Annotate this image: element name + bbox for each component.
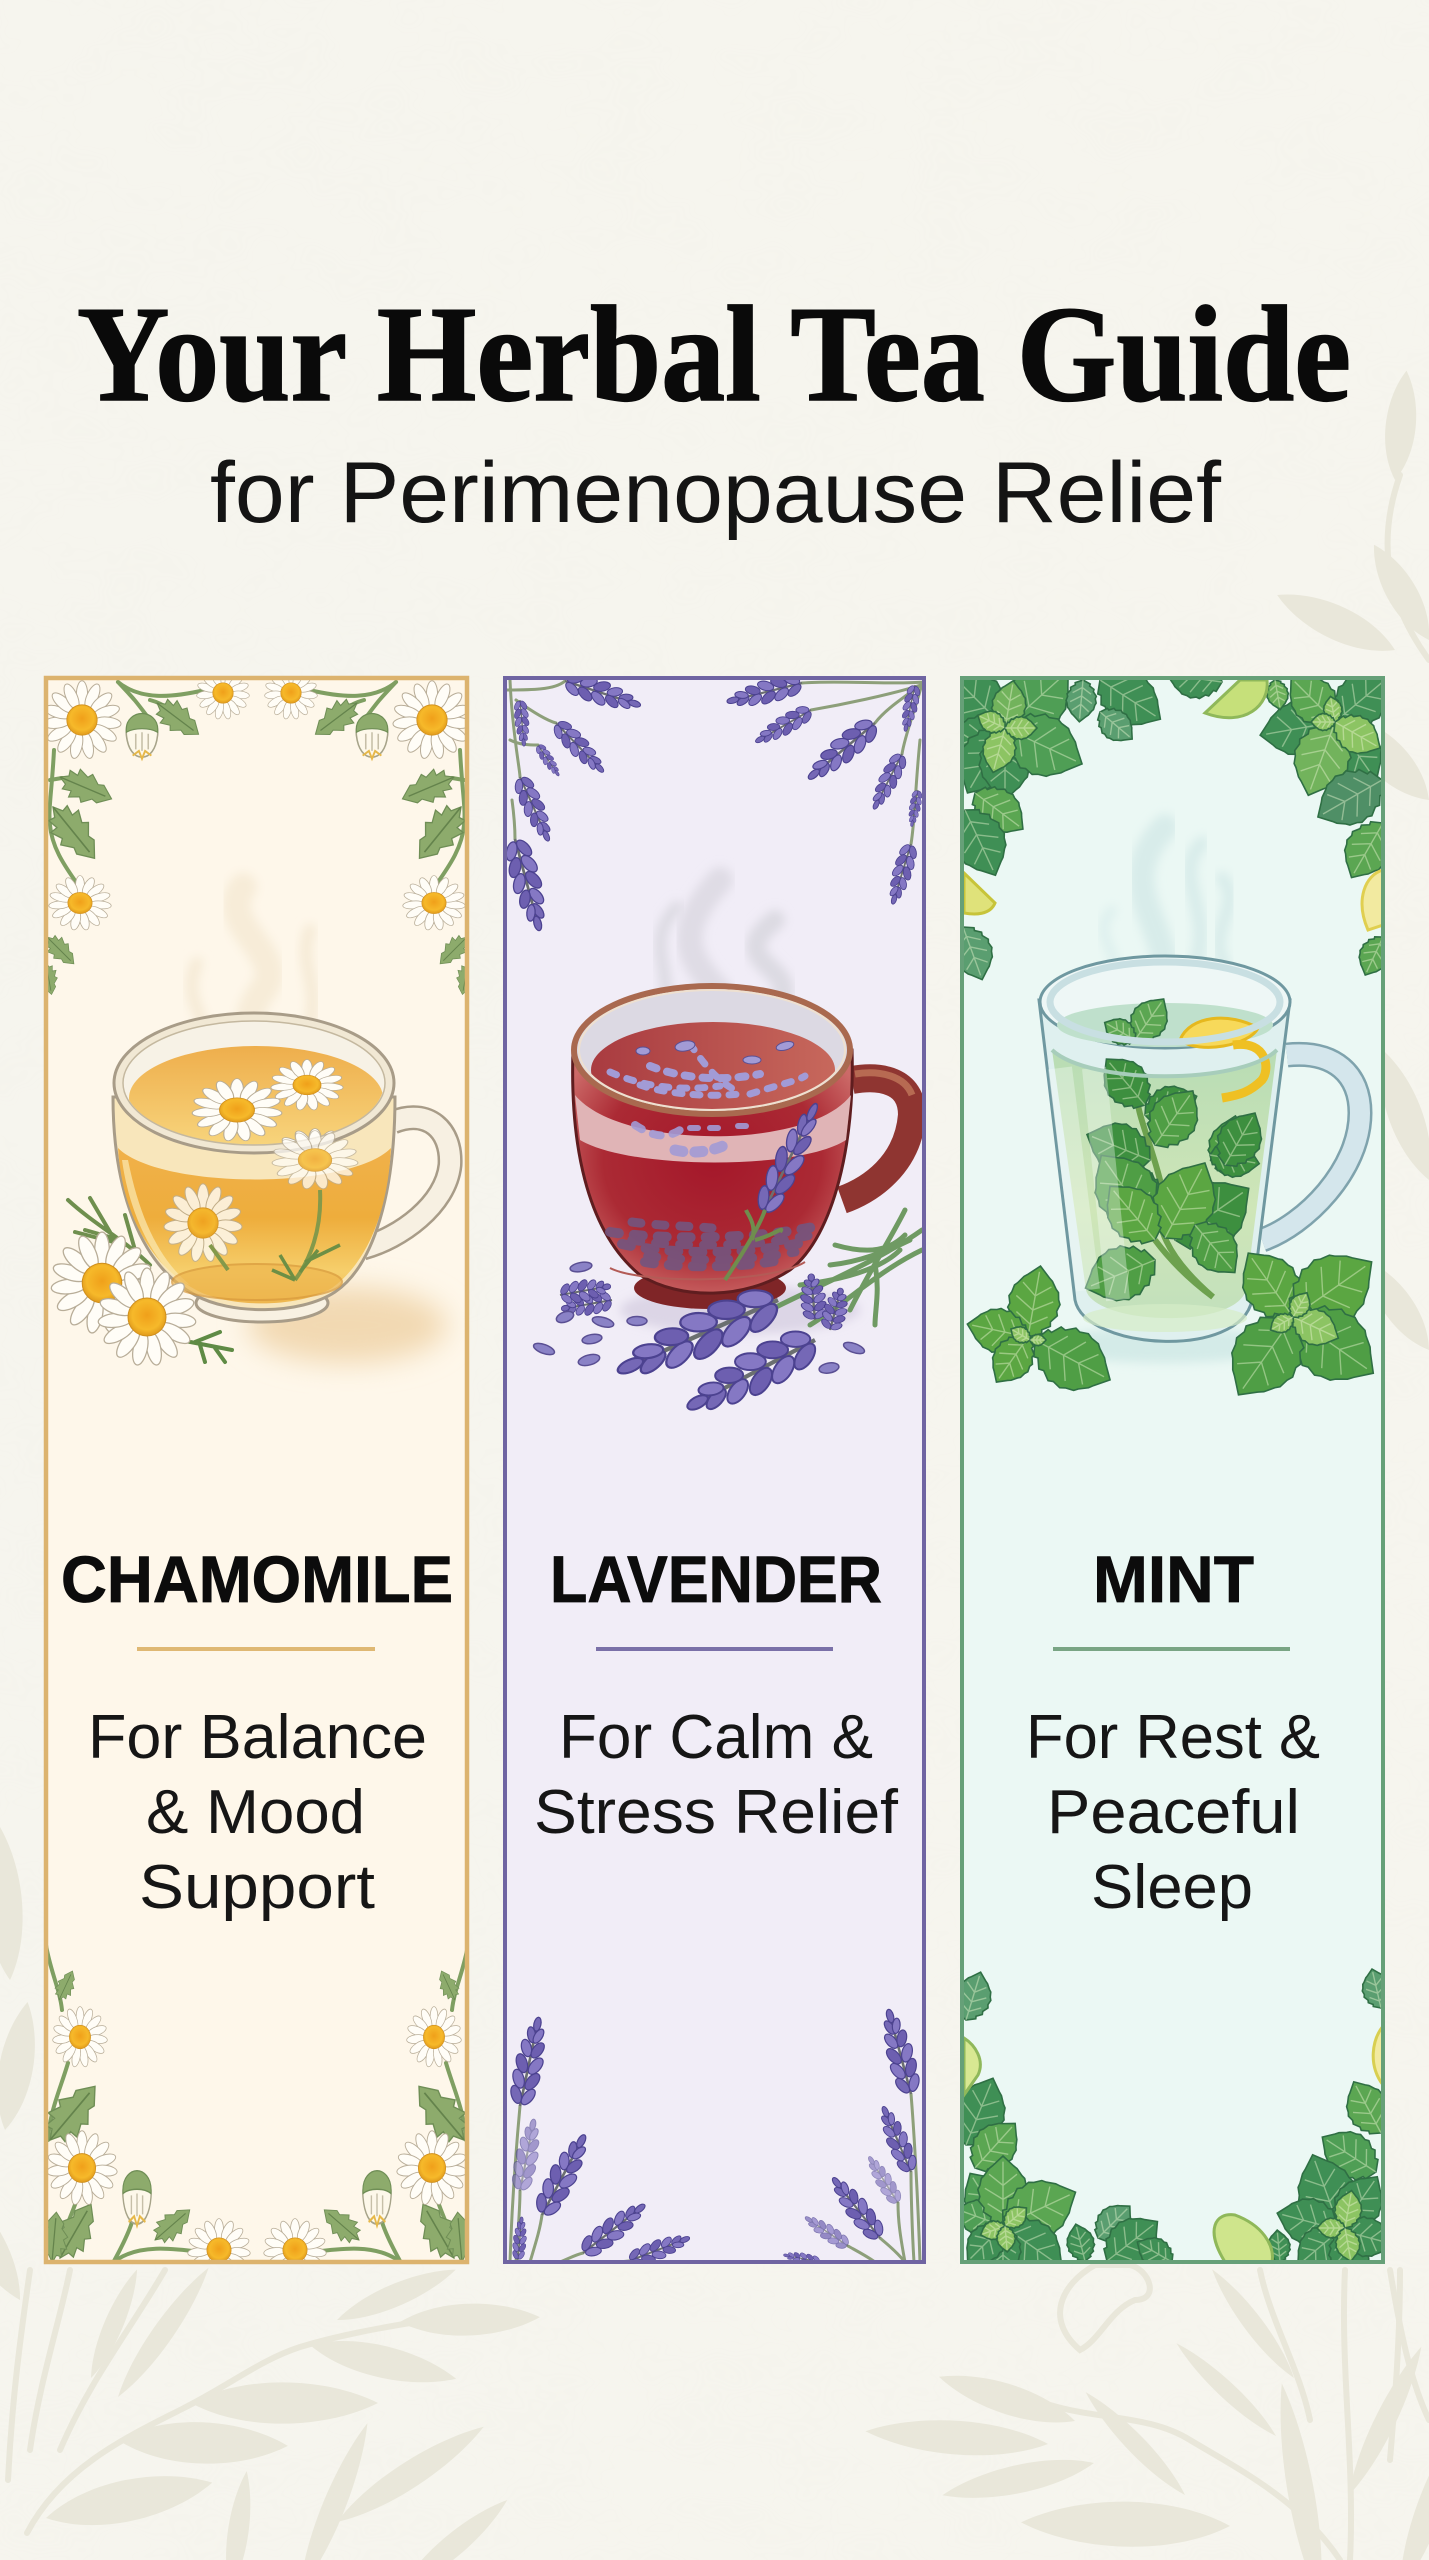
lavender border frame <box>505 678 924 2262</box>
subtitle: for Perimenopause Relief <box>210 445 1222 541</box>
chamomile benefit text: Support <box>139 1853 375 1922</box>
illustration: chamomile tea cup <box>51 887 450 1366</box>
chamomile floral border <box>36 667 478 2282</box>
chamomile border frame <box>46 678 467 2262</box>
background botanical: bottom right <box>864 2264 1429 2560</box>
chamomile benefit text <box>88 1703 427 1922</box>
submerged lavender buds <box>610 1222 822 1266</box>
background botanical: bottom left <box>0 1819 540 2560</box>
mint heading: MINT <box>1093 1542 1254 1616</box>
background botanical: top right <box>1270 369 1429 1359</box>
chamomile benefit text: For Balance <box>88 1703 427 1772</box>
mint benefit text: Peaceful <box>1047 1778 1300 1847</box>
top right cluster <box>1336 680 1381 723</box>
bottom left cluster <box>964 1971 992 2021</box>
mint benefit text <box>1026 1703 1320 1922</box>
mint card background <box>962 678 1383 2262</box>
illustration: mint tea glass <box>963 827 1394 1414</box>
mint border frame <box>962 678 1383 2262</box>
mint benefit text: For Rest & <box>1026 1703 1320 1772</box>
mint sprig inside glass <box>1137 1090 1213 1297</box>
chamomile card background <box>46 678 467 2262</box>
lavender heading: LAVENDER <box>550 1542 882 1616</box>
lavender benefit text: Stress Relief <box>534 1778 899 1847</box>
bottom right cluster <box>1362 1968 1381 2009</box>
lavender benefit text <box>534 1703 899 1847</box>
panel: lavender <box>499 667 926 2272</box>
mint benefit text: Sleep <box>1091 1853 1253 1922</box>
foreground lavender sprigs and stems <box>770 1210 922 1325</box>
top left cluster <box>964 680 1002 722</box>
limes and lemons <box>1205 680 1267 718</box>
chamomile benefit text: & Mood <box>146 1778 365 1847</box>
mint leaf border <box>964 680 1381 2260</box>
lavender card background <box>505 678 924 2262</box>
lavender benefit text: For Calm & <box>559 1703 873 1772</box>
panel: mint <box>960 676 1385 2264</box>
scattered lavender buds <box>532 1261 866 1375</box>
title: Your Herbal Tea Guide <box>77 278 1351 430</box>
lavender divider <box>596 1647 833 1651</box>
panel: chamomile <box>36 667 478 2282</box>
chamomile heading: CHAMOMILE <box>61 1542 453 1616</box>
cup rim and tea surface <box>577 992 847 1111</box>
mint divider <box>1053 1647 1290 1651</box>
lavender sprig border <box>499 667 926 2272</box>
chamomile divider <box>137 1647 375 1651</box>
illustration: lavender tea cup <box>532 880 922 1431</box>
mint leaves at glass base <box>1006 1265 1061 1336</box>
